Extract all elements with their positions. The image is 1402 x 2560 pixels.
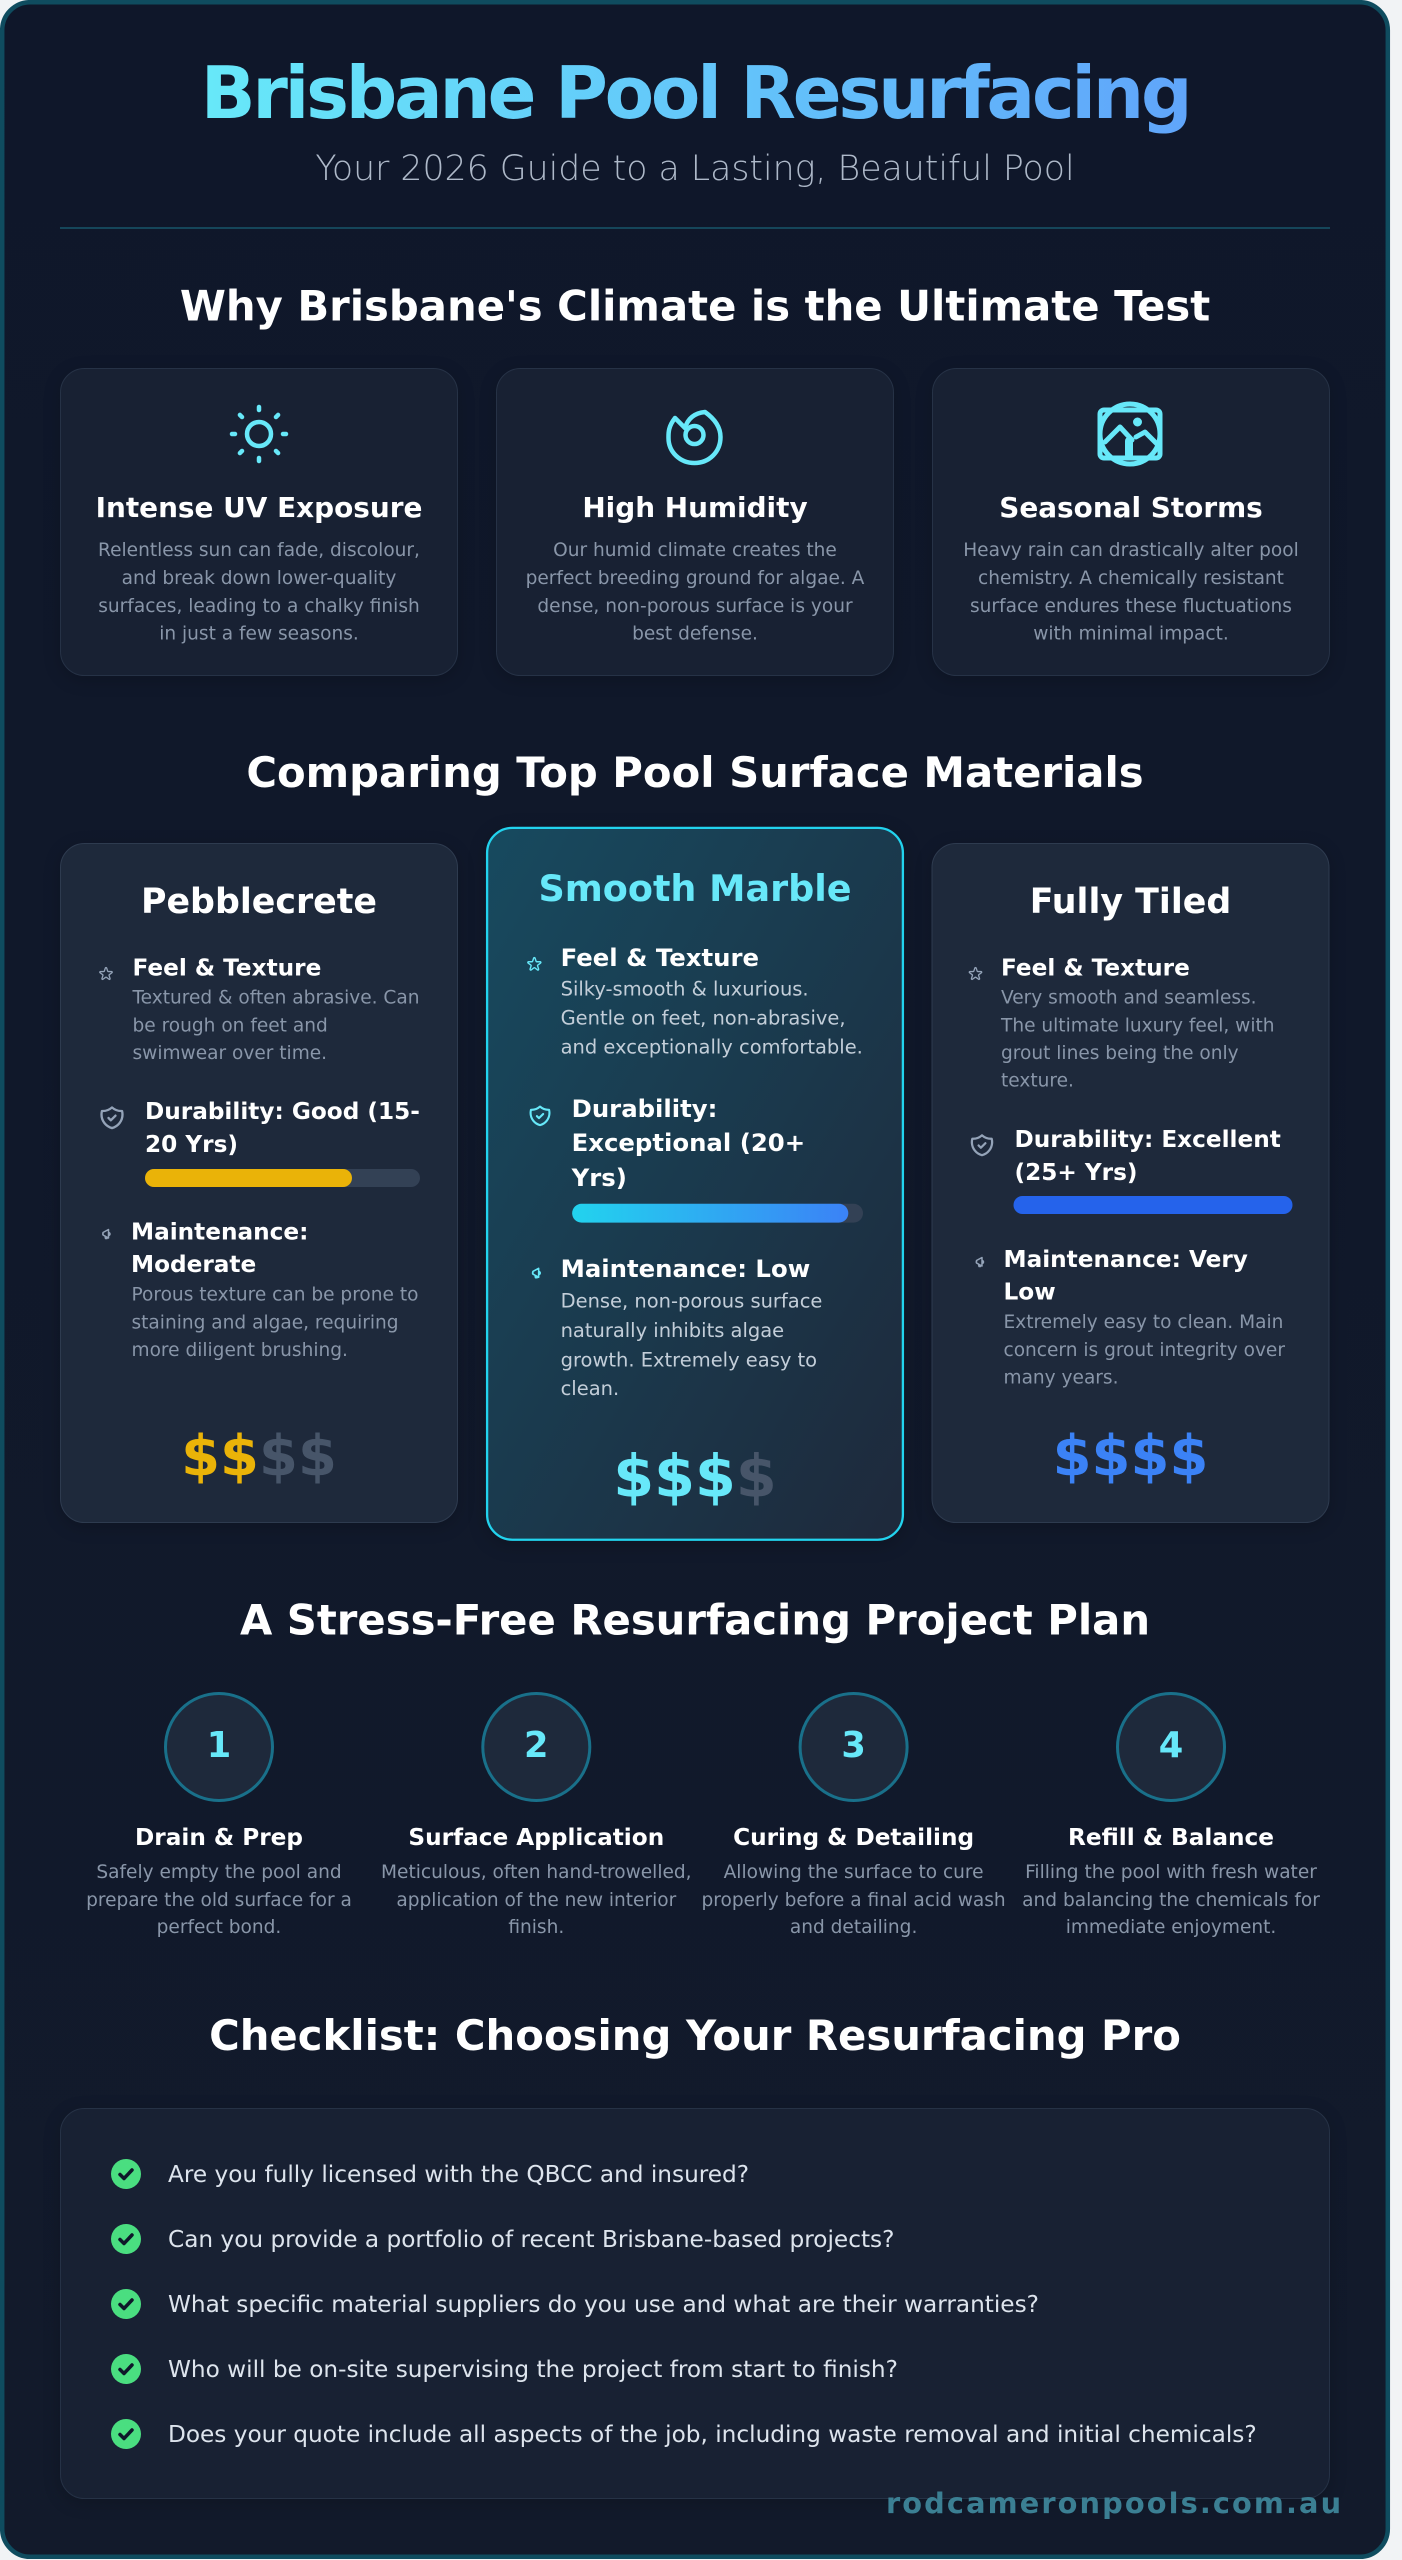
step 2 <box>381 1694 692 1938</box>
feel and texture: Very smooth and seamless. <box>1001 988 1257 1008</box>
durability: Durability: <box>572 1094 717 1123</box>
panel: climate cards <box>60 368 1330 676</box>
card text: surface endures these fluctuations <box>970 596 1292 617</box>
feel and texture: texture. <box>1001 1070 1074 1092</box>
panel: Fully Tiled <box>932 844 1329 1522</box>
step 3: Curing & Detailing <box>733 1824 974 1851</box>
icon: maintenance <box>103 1230 110 1238</box>
icon: storm picture <box>1100 404 1160 464</box>
cost rating: $$$$ <box>181 1424 337 1489</box>
step 3: Allowing the surface to cure <box>724 1862 984 1883</box>
step 1: perfect bond. <box>157 1917 281 1938</box>
maintenance: Low <box>1004 1278 1056 1306</box>
step 3 <box>701 1694 1006 1938</box>
step 2: 2 <box>524 1725 549 1766</box>
step 2: application of the new interior <box>396 1890 677 1911</box>
icon: humidity swirl <box>668 412 720 463</box>
card text: with minimal impact. <box>1033 624 1229 644</box>
durability: Durability: Good (15- <box>145 1098 420 1125</box>
maintenance: Maintenance: <box>131 1218 308 1246</box>
feel and texture: and exceptionally comfortable. <box>561 1036 863 1059</box>
step 4: Refill & Balance <box>1068 1824 1274 1851</box>
card text: and break down lower-quality <box>122 568 396 589</box>
step 3: 3 <box>841 1725 866 1766</box>
maintenance: Maintenance: Very <box>1004 1246 1248 1273</box>
step 1: prepare the old surface for a <box>86 1890 352 1911</box>
feel and texture <box>561 943 863 1059</box>
durability <box>571 1094 863 1223</box>
card text: perfect breeding ground for algae. A <box>526 568 865 589</box>
icon: star <box>528 958 541 970</box>
card text: Relentless sun can fade, discolour, <box>98 540 420 561</box>
card: humidity <box>496 368 894 676</box>
card text: chemistry. A chemically resistant <box>978 568 1284 589</box>
feel and texture: Textured & often abrasive. Can <box>132 988 420 1008</box>
title: Brisbane Pool Resurfacing <box>201 51 1189 135</box>
card: storms <box>932 368 1330 676</box>
feel and texture: The ultimate luxury feel, with <box>1000 1016 1275 1036</box>
maintenance: growth. Extremely easy to <box>561 1348 817 1371</box>
icon: shield <box>972 1135 992 1155</box>
step 2: Surface Application <box>408 1824 664 1851</box>
icon: star <box>969 967 982 979</box>
durability: Yrs) <box>571 1163 627 1192</box>
durability: Durability: Excellent <box>1014 1126 1281 1153</box>
maintenance <box>131 1218 418 1361</box>
card text: surfaces, leading to a chalky finish <box>98 596 420 617</box>
icon: sun <box>230 404 288 464</box>
maintenance: Porous texture can be prone to <box>132 1284 418 1306</box>
feel and texture: Feel & Texture <box>132 954 321 982</box>
feel and texture: swimwear over time. <box>132 1043 327 1064</box>
step 4: and balancing the chemicals for <box>1022 1890 1320 1911</box>
item 3: What specific material suppliers do you use and what are their warranties? <box>168 2291 1039 2318</box>
maintenance: Moderate <box>131 1251 256 1278</box>
maintenance: Extremely easy to clean. Main <box>1004 1312 1283 1333</box>
durability <box>1014 1126 1292 1214</box>
step 2: finish. <box>508 1917 564 1938</box>
heading: climate: Why Brisbane's Climate is the Ultimate Test <box>180 282 1210 330</box>
item 1: Are you fully licensed with the QBCC and insured? <box>168 2161 749 2188</box>
icon: star <box>100 967 112 979</box>
step 1: 1 <box>207 1725 231 1766</box>
durability: Exceptional (20+ <box>572 1128 805 1157</box>
maintenance: staining and algae, requiring <box>132 1312 399 1334</box>
item 4: Who will be on-site supervising the project from start to finish? <box>168 2356 898 2383</box>
cost rating: $$$$ <box>613 1442 777 1511</box>
icon: maintenance <box>976 1258 984 1266</box>
maintenance: concern is grout integrity over <box>1004 1340 1285 1361</box>
icon: maintenance <box>533 1268 540 1278</box>
material name: Smooth Marble <box>538 867 852 910</box>
panel: checklist <box>60 2108 1330 2498</box>
step 1: Safely empty the pool and <box>96 1862 342 1883</box>
maintenance <box>1004 1246 1285 1388</box>
card text <box>526 540 865 644</box>
step 1 <box>86 1694 352 1938</box>
card text: Heavy rain can drastically alter pool <box>963 540 1299 561</box>
durability <box>145 1098 420 1187</box>
card text: dense, non-porous surface is your <box>537 596 853 617</box>
item 5: Does your quote include all aspects of the job, including waste removal and initial chemicals? <box>168 2421 1257 2448</box>
feel and texture <box>132 954 420 1064</box>
icon: shield <box>531 1107 549 1125</box>
heading: checklist: Checklist: Choosing Your Resurfacing Pro <box>209 2011 1181 2060</box>
feel and texture: Gentle on feet, non-abrasive, <box>561 1007 846 1030</box>
feel and texture: grout lines being the only <box>1001 1043 1239 1064</box>
card text: in just a few seasons. <box>159 624 359 644</box>
heading: project plan: A Stress-Free Resurfacing Project Plan <box>240 1596 1150 1644</box>
maintenance: Maintenance: Low <box>561 1254 810 1283</box>
durability: 20 Yrs) <box>145 1131 238 1158</box>
maintenance: naturally inhibits algae <box>561 1319 784 1342</box>
durability: (25+ Yrs) <box>1014 1159 1138 1186</box>
maintenance: more diligent brushing. <box>132 1340 348 1361</box>
material name: Fully Tiled <box>1030 882 1231 922</box>
feel and texture: be rough on feet and <box>132 1016 328 1036</box>
step 1: Drain & Prep <box>135 1824 303 1851</box>
step 4: immediate enjoyment. <box>1066 1917 1276 1938</box>
subtitle: Your 2026 Guide to a Lasting, Beautiful Pool <box>315 149 1075 189</box>
feel and texture: Feel & Texture <box>561 943 759 972</box>
card title: Intense UV Exposure <box>96 491 422 524</box>
heading: materials: Comparing Top Pool Surface Materials <box>246 748 1144 797</box>
step 4: 4 <box>1159 1725 1183 1766</box>
step 3: and detailing. <box>790 1917 917 1938</box>
step 2: Meticulous, often hand-trowelled, <box>381 1862 692 1883</box>
card title: High Humidity <box>582 491 808 524</box>
panel: Smooth Marble (featured) <box>487 828 903 1540</box>
card text <box>963 540 1299 644</box>
maintenance: clean. <box>561 1377 619 1400</box>
card title: Seasonal Storms <box>999 491 1263 524</box>
watermark: rodcameronpools.com.au <box>886 2486 1343 2520</box>
card text: best defense. <box>632 624 758 644</box>
feel and texture <box>1000 954 1275 1092</box>
card: UV exposure <box>60 368 458 676</box>
feel and texture: Silky-smooth & luxurious. <box>561 977 809 1000</box>
material name: Pebblecrete <box>141 882 377 922</box>
card text <box>98 540 420 644</box>
step 4 <box>1022 1694 1320 1938</box>
step 3: properly before a final acid wash <box>701 1890 1006 1911</box>
maintenance <box>561 1254 822 1400</box>
card text: Our humid climate creates the <box>553 540 837 561</box>
process steps <box>86 1694 1320 1938</box>
feel and texture: Feel & Texture <box>1001 954 1190 982</box>
maintenance: Dense, non-porous surface <box>561 1290 822 1313</box>
item 2: Can you provide a portfolio of recent Brisbane-based projects? <box>168 2226 894 2253</box>
panel: Pebblecrete <box>60 844 458 1522</box>
maintenance: many years. <box>1004 1368 1118 1388</box>
step 4: Filling the pool with fresh water <box>1025 1862 1317 1883</box>
cost rating: $$$$ <box>1053 1424 1208 1489</box>
icon: shield <box>101 1107 122 1128</box>
